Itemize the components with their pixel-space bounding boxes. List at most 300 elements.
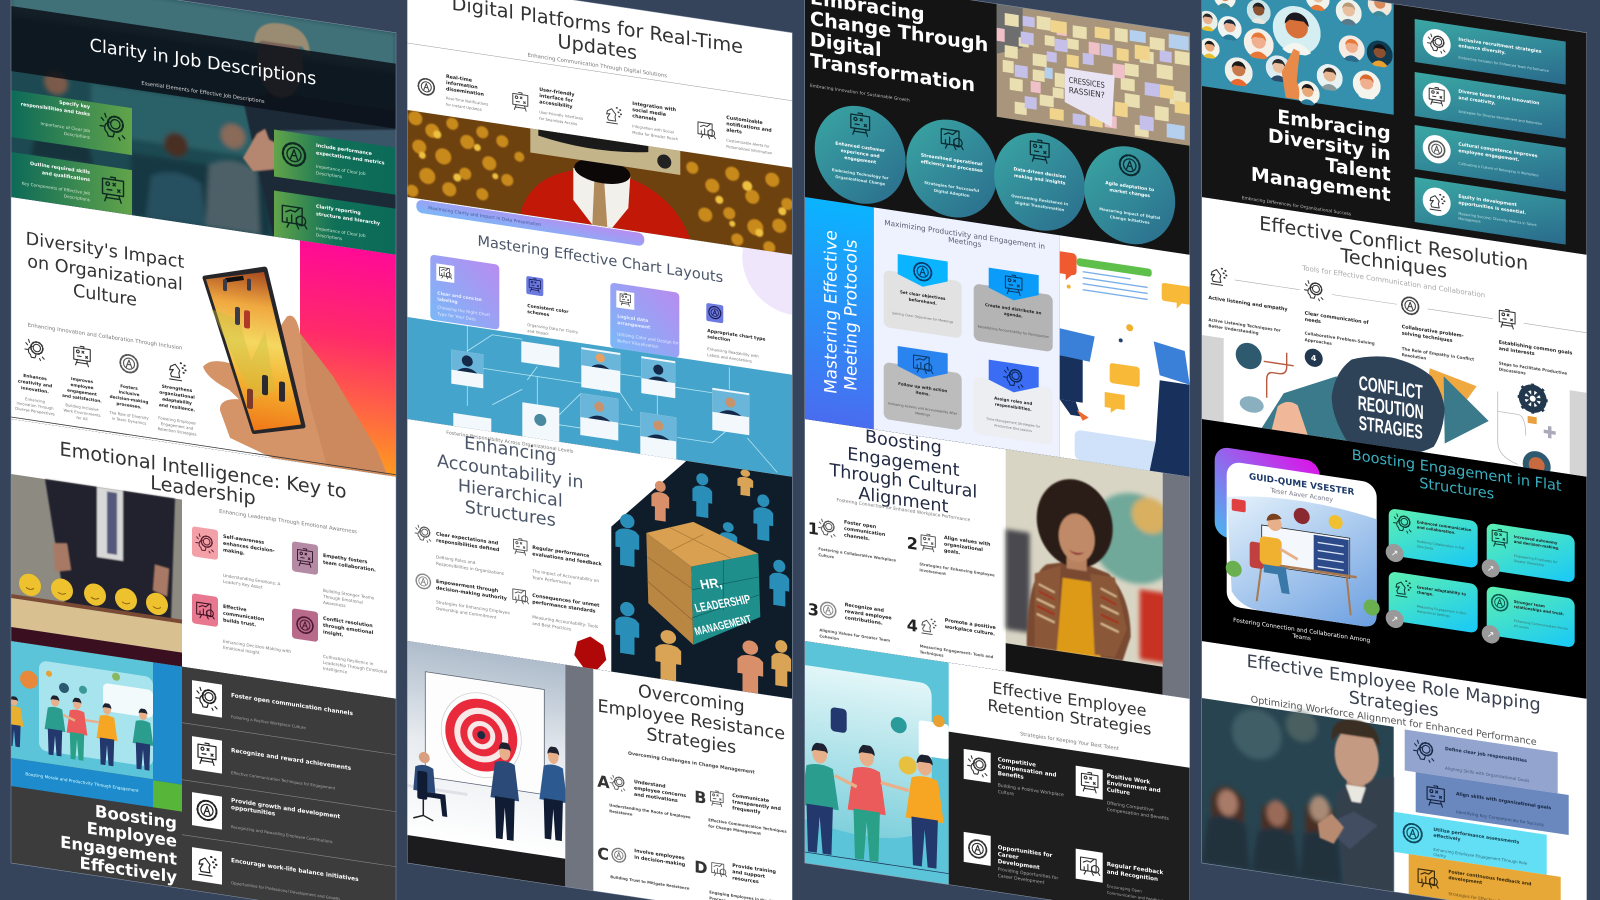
photo: leadership blocks: MANAGEMENT bbox=[693, 613, 754, 638]
subtitle: Maximizing Productivity and Engagement in bbox=[884, 218, 1045, 251]
card: career development: Development bbox=[998, 859, 1040, 871]
card: agenda: agenda. bbox=[1004, 311, 1023, 319]
card: performance expectations: Importance of Clear Job bbox=[316, 164, 366, 176]
point 2 bbox=[907, 529, 995, 584]
card: specify key responsibilities: Descriptions bbox=[64, 131, 90, 140]
card: communication: and collaboration. bbox=[1417, 524, 1456, 535]
card: self-awareness: Leader's Key Asset bbox=[223, 579, 263, 590]
vertical title: Meeting Protocols bbox=[842, 238, 862, 392]
point: real-time information: dissemination bbox=[446, 86, 484, 98]
point: decision making: processes. bbox=[116, 401, 142, 410]
point A: Understand bbox=[634, 779, 666, 790]
card: performance expectations bbox=[274, 129, 396, 195]
card: logical arrangement: Utilizing Color and Design for bbox=[617, 332, 679, 346]
card: adaptability: Hierarchical Settings bbox=[1417, 609, 1450, 618]
card: assign roles: Assign roles and bbox=[994, 395, 1032, 406]
card: inclusive recruitment: Inclusive recruitment strategies bbox=[1458, 37, 1542, 55]
left person bbox=[1060, 328, 1095, 422]
card: conflict resolution: Cultivating Resilience in bbox=[323, 654, 374, 666]
point: social media: Integration with bbox=[632, 101, 677, 113]
point: color schemes: and Impact bbox=[527, 328, 549, 336]
decorative lavender circle bbox=[742, 207, 842, 322]
card: empathy bbox=[292, 541, 376, 613]
card: outline required skills: and qualifications bbox=[42, 170, 90, 183]
illustration card: Teser Aaver Acaney bbox=[1269, 486, 1333, 504]
panel: retention strategies bbox=[801, 640, 1190, 900]
point 1: Culture bbox=[818, 552, 835, 559]
point B: B bbox=[694, 787, 706, 808]
card: cultural competence: Cultural competence improves bbox=[1458, 142, 1538, 159]
icon bbox=[1499, 309, 1515, 329]
chat window bbox=[1077, 258, 1152, 309]
card: conflict resolution bbox=[292, 608, 387, 680]
card: compensation: Building a Positive Workplace bbox=[998, 782, 1064, 798]
standing man bbox=[539, 744, 567, 842]
column 2 of slides bbox=[406, 0, 842, 900]
row: align skills: Align skills with organizational goals bbox=[1456, 791, 1551, 811]
row: align skills: Identifying Key Competencies for Success bbox=[1456, 809, 1544, 827]
point: social media: Media for Broader Reach bbox=[632, 131, 679, 141]
card: set objectives: beforehand. bbox=[909, 297, 937, 306]
card: equity: Management bbox=[1458, 217, 1481, 224]
icon tile bbox=[192, 792, 222, 830]
circle: agile adaptation: Change Initiatives bbox=[1110, 214, 1150, 225]
card: team relationships bbox=[1482, 585, 1575, 656]
row: recognize achievements: Effective Communication Techniques for Engagement bbox=[231, 770, 336, 791]
circle: data-driven decisions: Digital Transformation bbox=[1015, 200, 1065, 212]
point: consequences: performance standards bbox=[532, 599, 596, 615]
icon bbox=[1120, 154, 1140, 177]
panel: boosting engagement cultural alignment bbox=[805, 418, 1190, 699]
card: feedback: Regular Feedback bbox=[1107, 862, 1163, 876]
point: adaptability: Retention Strategies bbox=[158, 426, 196, 437]
point: real-time information bbox=[418, 70, 488, 113]
card: feedback bbox=[1076, 849, 1165, 900]
point: adaptability: adaptability bbox=[162, 396, 192, 407]
icon bbox=[1404, 823, 1422, 844]
circle: operational efficiency: Strategies for Successful bbox=[924, 180, 980, 193]
title: Diversity in bbox=[1268, 124, 1391, 165]
technique: active listening: Active listening and empathy bbox=[1208, 295, 1288, 313]
icon bbox=[1396, 580, 1411, 598]
card: conflict resolution: Intelligence bbox=[323, 666, 348, 675]
title: Effective Employee Role Mapping bbox=[1247, 652, 1541, 716]
circle: agile adaptation: Agile adaptation to bbox=[1105, 180, 1154, 193]
title: Through Cultural bbox=[828, 461, 977, 503]
card: feedback: and Recognition bbox=[1107, 869, 1158, 883]
card: empathy: Empathy fosters bbox=[323, 553, 367, 565]
icon bbox=[1492, 594, 1508, 612]
card: diverse teams: and creativity. bbox=[1458, 95, 1496, 107]
point 2: organizational bbox=[944, 541, 983, 553]
blue bars and green square bbox=[153, 662, 182, 785]
card: performance expectations: expectations and metrics bbox=[316, 150, 385, 167]
point: creativity: creativity and bbox=[18, 378, 52, 389]
card: clear labeling: Type for Your Data bbox=[436, 311, 476, 322]
card: work environment: Offering Competitive bbox=[1107, 800, 1154, 813]
point: decision making: The Role of Diversity bbox=[108, 410, 149, 421]
point 1: 1 bbox=[808, 519, 819, 539]
point 1 bbox=[808, 514, 896, 569]
point: engagement: Work Environments bbox=[64, 407, 101, 418]
point A bbox=[597, 772, 691, 826]
figures bbox=[615, 460, 789, 678]
subtitle: Strategies for Keeping Your Best Talent bbox=[1020, 731, 1119, 752]
card: communication: Effective bbox=[223, 604, 247, 613]
title: Mastering Effective Chart Layouts bbox=[477, 233, 723, 286]
caption: Teams bbox=[1292, 633, 1311, 642]
circle: customer experience: engagement bbox=[844, 155, 877, 166]
panel: mastering chart layouts bbox=[407, 157, 842, 491]
icon tile bbox=[192, 526, 218, 560]
icon tile bbox=[706, 303, 723, 323]
point B: frequently bbox=[732, 805, 761, 816]
title: Structures bbox=[465, 498, 556, 531]
small figures on phone screen bbox=[223, 275, 285, 414]
card: empathy: Awareness bbox=[323, 600, 346, 608]
icon bbox=[415, 525, 431, 543]
row: job responsibilities: Aligning Skills with Organizational Goals bbox=[1445, 766, 1529, 783]
point: real-time information: information bbox=[446, 80, 478, 91]
panel: digital platforms bbox=[406, 0, 793, 257]
icon tile bbox=[1076, 766, 1103, 800]
card: cultural competence: employee engagement. bbox=[1458, 148, 1520, 163]
point: notifications: alerts bbox=[726, 127, 742, 136]
point: chart type: Appropriate chart type bbox=[707, 328, 765, 343]
icon tile bbox=[192, 847, 222, 885]
point: color schemes: schemes bbox=[527, 309, 550, 318]
subtitle: Essential Elements for Effective Job Descriptions bbox=[141, 81, 265, 105]
card: specify key responsibilities: Specify key bbox=[59, 100, 91, 110]
card: autonomy: Increased autonomy bbox=[1514, 534, 1558, 545]
technique: clear communication: Clear communication of bbox=[1305, 310, 1370, 326]
point: empowerment: decision-making authority bbox=[436, 585, 508, 602]
point: social media: Integration with Social bbox=[632, 124, 674, 134]
pill banner: Maximizing Clarity and Impact in Data Presentation bbox=[428, 205, 541, 228]
point: color schemes: Organizing Data for Clarity bbox=[527, 322, 579, 335]
illustration card: GUID-QUME VSESTER bbox=[1249, 472, 1355, 498]
icon: chart bbox=[282, 205, 307, 230]
point C: in decision-making bbox=[634, 855, 686, 868]
illustration: laptop users and chat bubbles bbox=[1060, 251, 1190, 477]
card: autonomy: Greater Ownership bbox=[1514, 559, 1544, 567]
row: continuous feedback: Foster continuous feedback and bbox=[1448, 869, 1531, 887]
icon bbox=[1004, 367, 1023, 389]
row: job responsibilities: Define clear job responsibilities bbox=[1445, 746, 1527, 764]
point: empowerment: Empowerment through bbox=[436, 579, 499, 594]
point: creativity: Diverse Perspectives bbox=[15, 406, 55, 417]
dark title band bbox=[11, 6, 396, 129]
cube bbox=[646, 515, 758, 577]
card: empathy: Building Stronger Teams bbox=[323, 588, 374, 600]
photo: leader with emoji balls bbox=[11, 474, 182, 667]
card: follow up: Meetings bbox=[915, 411, 930, 417]
circle: customer experience: Organizational Change bbox=[835, 174, 886, 186]
card: logical arrangement bbox=[610, 282, 679, 358]
point C: C bbox=[597, 844, 609, 864]
point: creativity: Enhances bbox=[23, 373, 47, 382]
card: inclusive recruitment: enhance diversity. bbox=[1458, 43, 1506, 56]
icon bbox=[1030, 139, 1049, 164]
card: agenda: Create and distribute an bbox=[985, 302, 1042, 316]
technique: clear communication: Collaborative Problem-Solving bbox=[1305, 330, 1375, 346]
point: engagement: Building Inclusive bbox=[65, 402, 99, 412]
circle: operational efficiency: Streamlined operational bbox=[921, 152, 983, 168]
point 4: Measuring Engagement: Tools and bbox=[920, 643, 994, 659]
illustration: people shaking hands bbox=[801, 640, 949, 885]
row: performance assessments: Enhancing Employee Engagement Through Role bbox=[1433, 847, 1528, 866]
point 3: reward employee bbox=[845, 609, 892, 622]
circle: data-driven decisions: Data-driven decision bbox=[1013, 166, 1066, 180]
card: communication: Enhancing Decision-Making with bbox=[223, 639, 291, 654]
card: assign roles bbox=[974, 357, 1053, 445]
icon bbox=[1430, 193, 1445, 211]
point D: resources bbox=[732, 875, 759, 885]
point A: and motivations bbox=[634, 792, 678, 804]
icon: board bbox=[74, 345, 90, 367]
icon bbox=[941, 129, 963, 151]
card: autonomy: and decision-making. bbox=[1514, 539, 1560, 551]
row: performance assessments: Utilize performance assessments bbox=[1433, 827, 1519, 846]
note sign bbox=[1065, 68, 1115, 128]
icon bbox=[607, 106, 621, 124]
point: user-friendly interface: User-Friendly Interfaces bbox=[539, 110, 583, 121]
icon bbox=[821, 601, 836, 619]
point: expectations: Responsibilities in Organizations bbox=[436, 561, 504, 576]
card: performance expectations: Descriptions bbox=[316, 170, 342, 179]
point: engagement: Improves bbox=[71, 376, 93, 384]
row: performance assessments: effectively bbox=[1433, 833, 1460, 843]
technique: collaborative problem solving: The Role of Empathy in Conflict bbox=[1402, 346, 1474, 362]
column 1 of slides bbox=[4, 0, 396, 900]
icon bbox=[914, 355, 933, 374]
point: engagement: engagement bbox=[67, 387, 97, 397]
point C: Building Trust to Mitigate Resistance bbox=[610, 874, 690, 891]
point: real-time information: Real-Time Notifications bbox=[446, 96, 488, 107]
panel: enhancing accountability bbox=[407, 419, 792, 699]
point: adaptability bbox=[158, 360, 196, 437]
icon tile bbox=[192, 593, 218, 627]
card: adaptability: change. bbox=[1417, 589, 1434, 597]
card: equity: Equity in development bbox=[1458, 194, 1517, 208]
title: Culture bbox=[73, 281, 137, 311]
title: Hierarchical bbox=[458, 476, 563, 512]
point C bbox=[597, 843, 690, 891]
title: Talent bbox=[1325, 153, 1391, 186]
photo: foreground man bbox=[243, 18, 396, 255]
row: continuous feedback bbox=[1409, 854, 1561, 900]
card: work environment bbox=[1076, 766, 1169, 822]
card: adaptability bbox=[1386, 571, 1478, 640]
row: recognize achievements: Recognize and reward achievements bbox=[231, 748, 352, 772]
technique: collaborative problem solving: Collaborative problem- bbox=[1402, 324, 1464, 339]
seated person and desk bbox=[1250, 510, 1357, 616]
vertical title: Mastering Effective bbox=[822, 229, 842, 395]
circle: data-driven decisions: Overcoming Resistance in bbox=[1011, 193, 1068, 207]
card: follow up bbox=[884, 344, 962, 431]
icon bbox=[1429, 140, 1445, 158]
arrow button: ↗ bbox=[1487, 630, 1494, 641]
dark section bbox=[949, 732, 1190, 900]
card: diverse teams bbox=[1415, 72, 1566, 139]
card: inclusive recruitment: Embracing Inclusion for Enhanced Team Performance bbox=[1458, 56, 1549, 73]
row: foster open communication bbox=[192, 680, 354, 737]
point: decision making: inclusive bbox=[119, 389, 140, 397]
note sign: CRESSICES bbox=[1069, 76, 1105, 90]
card: communication: Structures bbox=[1417, 544, 1434, 551]
subtitle: Embracing Differences for Organizational Success bbox=[1242, 195, 1352, 218]
point C: Involve employees bbox=[634, 848, 685, 862]
card: autonomy: Empowering Employees for bbox=[1514, 554, 1558, 564]
card: follow up: items. bbox=[916, 390, 930, 397]
card: team relationships: All Levels bbox=[1514, 624, 1529, 630]
card: self-awareness bbox=[192, 526, 280, 592]
card: reporting structure bbox=[274, 190, 396, 255]
icon bbox=[914, 262, 931, 282]
title: Updates bbox=[558, 30, 637, 64]
card: cultural competence bbox=[1415, 125, 1566, 192]
card: clear labeling bbox=[430, 254, 499, 330]
point: evaluations: The Impact of Accountability on bbox=[531, 568, 599, 583]
phone bbox=[205, 260, 303, 439]
title: Effective Employee bbox=[992, 678, 1147, 720]
icon bbox=[1305, 280, 1323, 301]
point: empowerment: Ownership and Commitment bbox=[436, 606, 497, 620]
circle: customer experience: Enhanced customer bbox=[835, 141, 886, 154]
subtitle: Embracing Innovation for Sustainable Growth bbox=[810, 83, 910, 104]
icon tile bbox=[964, 832, 991, 866]
subtitle: Tools for Effective Communication and Collaboration bbox=[1301, 263, 1485, 300]
icon tile bbox=[192, 736, 222, 774]
title: Strategies bbox=[646, 725, 736, 758]
point: creativity: Innovation Through bbox=[16, 400, 54, 411]
point 2: Align values with bbox=[944, 535, 991, 548]
technique: active listening bbox=[1208, 267, 1288, 340]
circle: agile adaptation bbox=[1084, 140, 1175, 251]
subtitle: Overcoming Challenges in Change Management bbox=[628, 751, 755, 776]
point D bbox=[694, 857, 785, 900]
row: align skills bbox=[1416, 772, 1569, 835]
icon bbox=[612, 847, 626, 863]
subtitle: Optimizing Workforce Alignment for Enhanced Performance bbox=[1251, 694, 1537, 748]
point: social media: channels bbox=[632, 113, 656, 123]
card: communication: Fostering Collaboration in Flat bbox=[1417, 539, 1465, 551]
title: Accountability in bbox=[437, 452, 584, 493]
circle: agile adaptation: market changes bbox=[1109, 187, 1150, 199]
card: adaptability: Measuring Engagement in Non- bbox=[1417, 604, 1467, 616]
panel: flat structures bbox=[1202, 419, 1587, 699]
card: autonomy bbox=[1482, 522, 1575, 590]
title: Effective Conflict Resolution bbox=[1259, 212, 1528, 275]
panel: boosting employee engagement bbox=[4, 640, 396, 900]
emoji balls bbox=[19, 572, 168, 617]
icon tile bbox=[616, 290, 634, 310]
title: Diversity's Impact bbox=[26, 229, 184, 273]
icon bbox=[1005, 274, 1022, 296]
panel: embracing diversity bbox=[1198, 0, 1587, 255]
column 3 of slides bbox=[801, 0, 1190, 900]
arrow button: ↗ bbox=[1391, 548, 1398, 559]
point: color schemes bbox=[526, 276, 579, 341]
card: career development: Providing Opportunities for bbox=[998, 866, 1058, 882]
card: work environment: Compensation and Benefits bbox=[1107, 807, 1169, 822]
icon bbox=[1428, 34, 1445, 54]
circle: agile adaptation: Measuring Impact of Digital bbox=[1099, 206, 1161, 220]
icon bbox=[513, 92, 528, 111]
title: Management bbox=[1251, 162, 1391, 206]
card: diverse teams: Strategies for Diverse Recruitment and Retention bbox=[1458, 110, 1542, 126]
point: engagement: and satisfaction. bbox=[62, 393, 102, 404]
point 3: Aligning Values for Greater Team bbox=[819, 627, 890, 643]
point A: A bbox=[597, 772, 610, 792]
card: self-awareness: making. bbox=[223, 547, 245, 557]
note sign: RASSIEN? bbox=[1069, 86, 1105, 100]
icon: board bbox=[102, 176, 124, 204]
caption: Fostering Connection and Collaboration Among bbox=[1233, 618, 1371, 644]
standing man bbox=[490, 740, 519, 842]
card: specify key responsibilities: responsibilities and tasks bbox=[21, 101, 90, 118]
point: social media bbox=[607, 97, 679, 141]
icon bbox=[1414, 740, 1434, 763]
icon bbox=[1429, 86, 1444, 106]
icon bbox=[710, 790, 723, 807]
card: conflict resolution: insight. bbox=[323, 629, 344, 638]
technique: common goals: Discussions bbox=[1499, 367, 1526, 376]
icon bbox=[1394, 513, 1411, 534]
hand holding phone bbox=[203, 260, 396, 477]
point D: D bbox=[694, 857, 708, 878]
icon bbox=[818, 519, 835, 538]
photo: sticky note wall bbox=[997, 4, 1190, 146]
card: assign roles: responsibilities. bbox=[995, 402, 1032, 412]
seated man and desk bbox=[407, 750, 467, 826]
row: foster open communication: Fostering a Positive Workplace Culture bbox=[231, 714, 306, 730]
title: Change Through bbox=[810, 7, 988, 57]
card: outline required skills: Outline required skills bbox=[30, 161, 90, 176]
photo: leadership blocks: HR, bbox=[698, 575, 724, 592]
photo: leadership blocks bbox=[611, 450, 792, 699]
point B: Communicate bbox=[732, 793, 770, 804]
point: adaptability: and resilience. bbox=[159, 402, 195, 414]
point: chart type bbox=[706, 303, 765, 366]
point: notifications: Personalized Information bbox=[726, 145, 773, 156]
card: career development bbox=[964, 832, 1058, 888]
point 2: Involvement bbox=[919, 567, 946, 576]
panel: role mapping bbox=[1202, 641, 1587, 900]
row: performance assessments bbox=[1394, 812, 1547, 875]
monitor bbox=[1262, 525, 1350, 578]
card: career development: Career Development bbox=[998, 873, 1045, 886]
point: empowerment: Strategies for Enhancing Employee bbox=[436, 599, 510, 615]
card: assign roles: Productive Discussions bbox=[994, 423, 1032, 433]
card: logical arrangement: arrangement bbox=[617, 320, 651, 331]
point: decision making bbox=[108, 352, 149, 426]
point: user-friendly interface: for Seamless Access bbox=[539, 117, 577, 126]
row: work-life balance bbox=[192, 847, 359, 900]
image: conflict resolution banner: 4 bbox=[1311, 353, 1317, 363]
panel: effective meeting protocols bbox=[805, 197, 1190, 477]
icon bbox=[851, 112, 870, 137]
card: follow up: Following Actions and Accountability After bbox=[888, 402, 958, 416]
red heptagon bbox=[574, 634, 606, 671]
card: communication bbox=[192, 593, 291, 660]
card: work environment: Environment and bbox=[1107, 780, 1161, 794]
technique: collaborative problem solving bbox=[1402, 296, 1474, 368]
point: creativity: Enhancing bbox=[25, 396, 46, 404]
point: creativity: innovation. bbox=[21, 385, 49, 395]
card: clear labeling: Choosing the Right Chart bbox=[437, 305, 490, 317]
point: evaluations: Team Performance bbox=[531, 575, 572, 586]
